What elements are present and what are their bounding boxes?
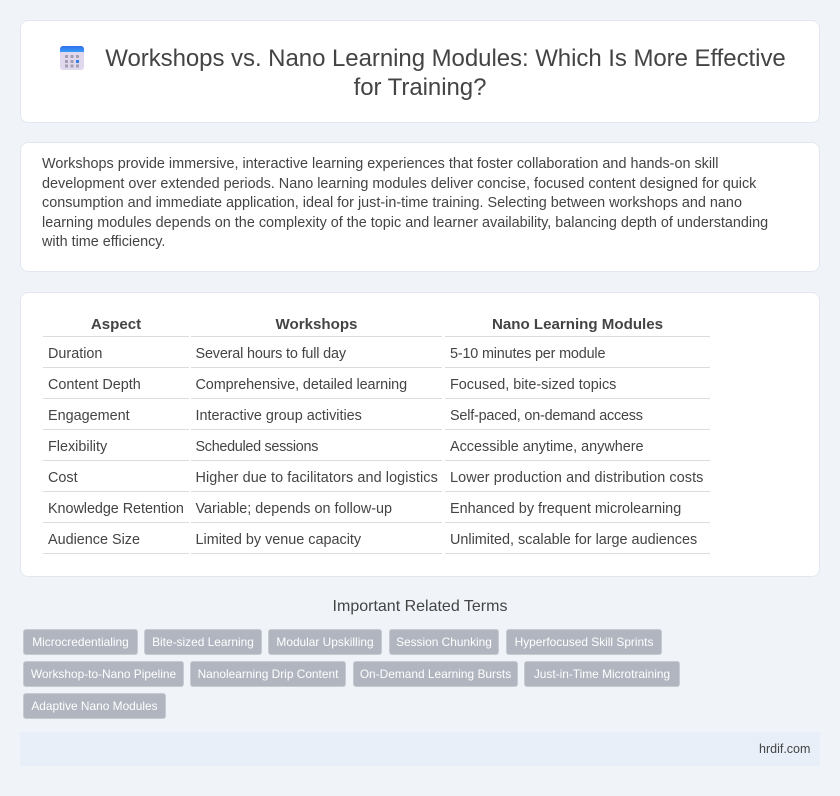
table header: Nano Learning Modules: [492, 316, 663, 333]
row: knowledge retention: [48, 501, 681, 517]
row: knowledge retention: Knowledge Retention: [48, 501, 184, 517]
row: cost: [48, 470, 703, 486]
tag: Workshop-to-Nano Pipeline: [31, 667, 176, 681]
row: flexibility: Accessible anytime, anywhere: [450, 439, 644, 455]
tag: [524, 661, 680, 687]
row: content depth: Content Depth: [48, 377, 141, 393]
tag: [389, 629, 499, 655]
tag: Modular Upskilling: [276, 635, 374, 649]
intro text: Workshops provide immersive, interactive learning experiences that foster collaboration and hands-on skill: [42, 156, 718, 172]
tag: [190, 661, 346, 687]
tag: Nanolearning Drip Content: [198, 667, 338, 681]
row: audience size: Limited by venue capacity: [196, 532, 361, 548]
table header: Aspect: [91, 316, 141, 333]
row: duration: [48, 346, 605, 362]
row: audience size: Unlimited, scalable for large audiences: [450, 532, 697, 548]
related terms heading: Important Related Terms: [333, 598, 507, 615]
row: engagement: Interactive group activities: [196, 408, 362, 424]
row: duration: Duration: [48, 346, 102, 362]
related term tags: [23, 629, 680, 719]
row: flexibility: Flexibility: [48, 439, 107, 455]
title: for Training?: [354, 74, 486, 101]
tag: Session Chunking: [396, 635, 492, 649]
row: engagement: [48, 408, 643, 424]
tag: [23, 693, 166, 719]
row: engagement: Self-paced, on-demand access: [450, 408, 643, 424]
row: knowledge retention: Enhanced by frequent microlearning: [450, 501, 681, 517]
tag: Just-in-Time Microtraining: [534, 667, 670, 681]
tag: Adaptive Nano Modules: [31, 699, 158, 713]
table header: Workshops: [276, 316, 357, 333]
row: cost: Higher due to facilitators and logistics: [196, 470, 438, 486]
intro text: learning modules depends on the complexity of the topic and learner availability, balancing depth of understanding: [42, 214, 768, 230]
row: audience size: [48, 532, 697, 548]
panel: intro card: [20, 142, 820, 272]
intro text: [42, 156, 768, 250]
tag: [23, 661, 184, 687]
tag: [144, 629, 262, 655]
tag: Microcredentialing: [32, 635, 129, 649]
row: cost: Lower production and distribution costs: [450, 470, 703, 486]
title: Workshops vs. Nano Learning Modules: Which Is More Effective: [105, 45, 786, 72]
row: flexibility: [48, 439, 644, 455]
panel: comparison table card: [20, 292, 820, 577]
row: duration: Several hours to full day: [196, 346, 346, 362]
row: audience size: Audience Size: [48, 532, 140, 548]
row: content depth: Comprehensive, detailed learning: [196, 377, 407, 393]
row: content depth: Focused, bite-sized topics: [450, 377, 616, 393]
tag: [353, 661, 518, 687]
tag: [23, 629, 138, 655]
footer text: hrdif.com: [759, 742, 810, 756]
panel: title card: [20, 20, 820, 123]
row: knowledge retention: Variable; depends on follow-up: [196, 501, 392, 517]
comparison table: [43, 316, 710, 554]
row: cost: Cost: [48, 470, 78, 486]
intro text: development over extended periods. Nano learning modules deliver concise, focused content designed for quick: [42, 176, 756, 192]
row: flexibility: Scheduled sessions: [196, 439, 318, 455]
tag: [506, 629, 662, 655]
tag: [268, 629, 382, 655]
tag: Bite-sized Learning: [152, 635, 254, 649]
icon: calendar: [60, 46, 84, 70]
title: [105, 45, 786, 101]
row: engagement: Engagement: [48, 408, 130, 424]
footer bar: [20, 732, 820, 766]
row: content depth: [48, 377, 616, 393]
tag: On-Demand Learning Bursts: [360, 667, 511, 681]
intro text: with time efficiency.: [42, 234, 165, 250]
tag: Hyperfocused Skill Sprints: [515, 635, 653, 649]
table header: [91, 316, 663, 333]
intro text: consumption and immediate application, ideal for just-in-time training. Selecting between workshops and nano: [42, 195, 742, 211]
row: duration: 5-10 minutes per module: [450, 346, 605, 362]
